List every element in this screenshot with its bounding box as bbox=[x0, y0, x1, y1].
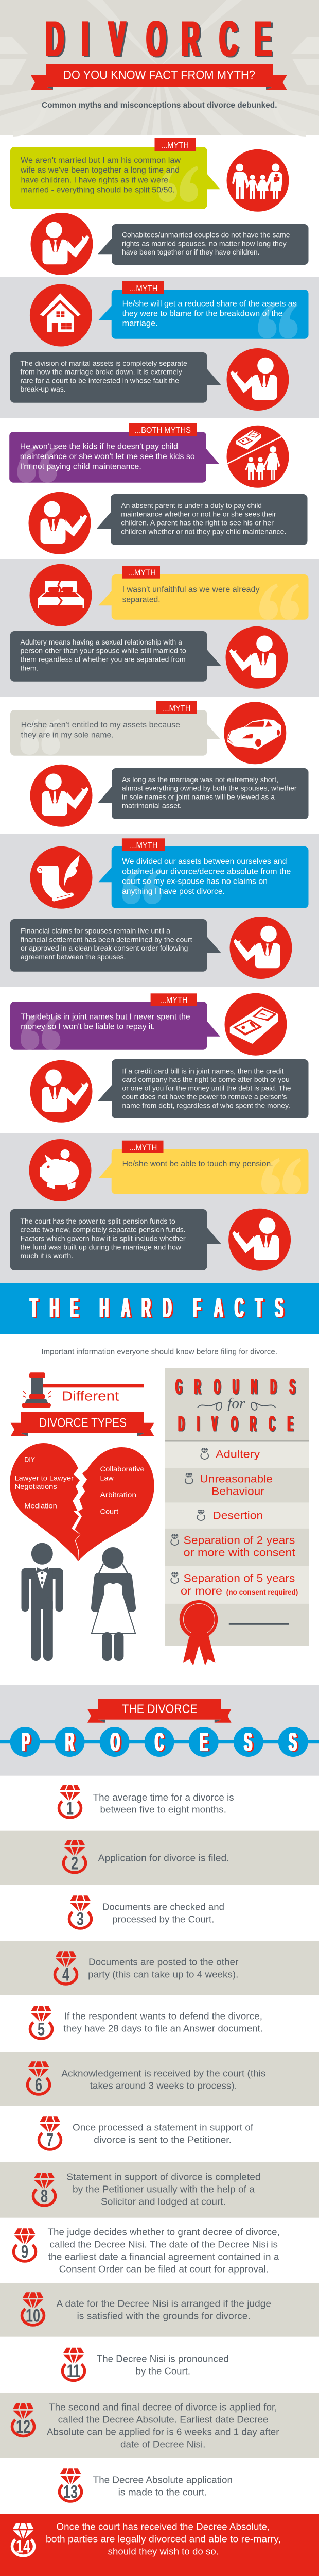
myth text bbox=[122, 857, 291, 896]
chart: broken heart with divorce types: Negotiations bbox=[14, 1482, 57, 1490]
step 9: Consent Order can be filed at court for approval. bbox=[59, 2264, 269, 2275]
ground: separation of 2 years: Separation of 2 years bbox=[184, 1535, 295, 1547]
myth tag bbox=[154, 138, 196, 151]
step 12: 12 bbox=[16, 2417, 30, 2437]
step 4: Documents are posted to the other bbox=[88, 1957, 238, 1968]
myth tag bbox=[122, 1141, 164, 1153]
subtitle: Common myths and misconceptions about divorce debunked. bbox=[42, 101, 277, 110]
answer text bbox=[21, 638, 186, 672]
answer text bbox=[21, 927, 192, 961]
myth text: obtained our divorce/decree absolute from the bbox=[122, 867, 291, 876]
answer text: person other than your spouse while still married to bbox=[21, 647, 186, 655]
step 1: The average time for a divorce is bbox=[93, 1792, 234, 1803]
answer text: The court has the power to split pension funds to bbox=[21, 1217, 175, 1225]
answer text: matrimonial asset. bbox=[122, 802, 182, 809]
step 10: A date for the Decree Nisi is arranged if the judge bbox=[57, 2298, 271, 2309]
banner: the hard facts bbox=[0, 1283, 319, 1334]
icon: lawyer bbox=[229, 917, 292, 979]
ground: unreasonable behaviour: Behaviour bbox=[211, 1486, 264, 1498]
step 14 panel bbox=[0, 2514, 319, 2576]
step 6 bbox=[0, 2052, 319, 2106]
myth text bbox=[21, 721, 180, 739]
step 5: If the respondent wants to defend the divorce, bbox=[64, 2010, 262, 2021]
myth text: have children. I have rights as if we were bbox=[21, 176, 168, 184]
icon: money and children bbox=[226, 426, 289, 488]
answer text: Financial claims for spouses remain live until a bbox=[21, 927, 171, 935]
step 11: 11 bbox=[67, 2361, 80, 2381]
step 1 bbox=[59, 1785, 234, 1819]
panel: answer 8 bbox=[10, 1209, 291, 1271]
myth tag: ...MYTH bbox=[163, 704, 190, 713]
ribbon: the divorce bbox=[87, 1699, 232, 1723]
ground: adultery: Adultery bbox=[216, 1448, 260, 1460]
heading: different: Different bbox=[62, 1389, 119, 1403]
step 14 panel: should they wish to do so. bbox=[108, 2546, 219, 2557]
step 12: date of Decree Nisi. bbox=[120, 2439, 205, 2450]
step 2: 2 bbox=[71, 1853, 78, 1873]
myth text bbox=[21, 1012, 190, 1031]
band: section background bbox=[0, 277, 319, 418]
step 13: The Decree Absolute application bbox=[93, 2474, 233, 2485]
chart: broken heart with divorce types bbox=[10, 1443, 154, 1561]
myth tag: ...MYTH bbox=[130, 841, 157, 850]
ground: separation of 5 years: or more bbox=[181, 1585, 222, 1597]
panel: myth 2 reduced share bbox=[30, 281, 308, 346]
answer text: As long as the marriage was not extremely short, bbox=[122, 776, 278, 784]
chart: broken heart with divorce types: Lawyer to Lawyer bbox=[14, 1473, 74, 1482]
ground: separation of 5 years bbox=[165, 1566, 309, 1604]
myth text bbox=[20, 443, 195, 471]
band: section background bbox=[0, 834, 319, 987]
icon: lawyer bbox=[228, 1209, 291, 1271]
panel: answer 3 bbox=[29, 492, 308, 554]
step 6: Acknowledgement is received by the court (this bbox=[61, 2068, 265, 2079]
step 6: takes around 3 weeks to process). bbox=[90, 2080, 237, 2091]
step 7: Once processed a statement in support of bbox=[73, 2122, 254, 2133]
myth tag: ...MYTH bbox=[130, 284, 157, 293]
step 2: Application for divorce is filed. bbox=[98, 1852, 229, 1863]
answer text: The division of marital assets is completely separate bbox=[21, 360, 187, 367]
icon: lawyer bbox=[30, 765, 93, 827]
step 4 bbox=[0, 1941, 319, 1995]
panel: grounds for divorce bbox=[165, 1368, 309, 1666]
panel: answer 2 bbox=[10, 348, 289, 411]
answer text: almost everything owned by both the spouses, whether bbox=[122, 785, 297, 792]
step 14 panel: both parties are legally divorced and able to re-marry, bbox=[46, 2534, 281, 2545]
ribbon: do you know fact from myth: DO YOU KNOW FACT FROM MYTH? bbox=[63, 68, 255, 82]
step 5: 5 bbox=[38, 2020, 45, 2040]
answer text: or approved in a clean break consent order following bbox=[21, 944, 188, 952]
icon: gavel bbox=[22, 1372, 144, 1408]
ribbon: divorce types bbox=[11, 1412, 154, 1436]
chart: broken heart with divorce types: Law bbox=[100, 1473, 114, 1482]
step 7: divorce is sent to the Petitioner. bbox=[94, 2134, 232, 2145]
step 14 panel: Once the court has received the Decree Absolute, bbox=[57, 2521, 270, 2532]
icon: rosette seal and signature line bbox=[180, 1600, 289, 1666]
myth tag bbox=[129, 423, 197, 436]
ground: desertion bbox=[165, 1503, 309, 1529]
step 9: 9 bbox=[21, 2242, 28, 2262]
myth tag bbox=[122, 281, 164, 294]
answer text: rare for a court to be interested in whose fault the bbox=[21, 377, 179, 384]
answer text: them regardless of whether you are separated from bbox=[21, 655, 186, 663]
panel: myth 3 child maintenance bbox=[9, 423, 289, 488]
ground: adultery bbox=[165, 1442, 309, 1468]
step 10 bbox=[0, 2283, 319, 2337]
ground: unreasonable behaviour: Unreasonable bbox=[200, 1473, 273, 1485]
step 8: Statement in support of divorce is completed bbox=[66, 2172, 261, 2182]
answer text: Adultery means having a sexual relationship with a bbox=[21, 638, 182, 646]
answer text: much it is worth. bbox=[21, 1252, 73, 1260]
myth text: money so I won't be liable to repay it. bbox=[21, 1023, 155, 1031]
heading: for with flourishes: for bbox=[227, 1396, 245, 1412]
panel: answer 6 bbox=[10, 917, 292, 979]
step 10: 10 bbox=[26, 2306, 40, 2326]
answer text: the fund was built up during the marriage and how bbox=[21, 1243, 181, 1251]
icon: money bbox=[224, 993, 287, 1056]
panel: different divorce types bbox=[10, 1372, 154, 1661]
step 4: 4 bbox=[62, 1965, 69, 1985]
answer text: rights as married spouses, no matter how long they bbox=[122, 240, 287, 247]
icon: house bbox=[30, 284, 92, 346]
panel: myth 6 post divorce claims bbox=[30, 838, 309, 909]
answer text: in sole names or joint names will be viewed as a bbox=[122, 793, 275, 801]
panel: answer 5 bbox=[30, 765, 309, 827]
myth tag: ...MYTH bbox=[161, 141, 189, 150]
step 7 bbox=[39, 2116, 254, 2150]
panel: answer 7 bbox=[30, 1059, 309, 1123]
step 8: by the Petitioner usually with the help of a bbox=[73, 2184, 255, 2195]
icon: piggy bank bbox=[29, 1139, 92, 1201]
step 8 bbox=[0, 2162, 319, 2218]
step 3 bbox=[69, 1895, 224, 1929]
step 8: Solicitor and lodged at court. bbox=[101, 2196, 226, 2207]
step 12: Absolute can be applied for is 6 weeks and 1 day after bbox=[47, 2427, 279, 2437]
answer text: card company has the right to come after both of you bbox=[122, 1076, 290, 1083]
answer text: have been together or if they have children. bbox=[122, 248, 259, 256]
icon: family bbox=[226, 149, 289, 212]
step 10: is satisfied with the grounds for divorce. bbox=[77, 2311, 251, 2321]
myth tag bbox=[122, 566, 160, 579]
step 3: 3 bbox=[77, 1909, 84, 1929]
myth text: We divided our assets between ourselves and bbox=[122, 857, 287, 866]
step 12 bbox=[0, 2393, 319, 2458]
title: DIVORCE bbox=[46, 12, 271, 67]
answer text: break-up was. bbox=[21, 385, 66, 393]
myth tag: ...MYTH bbox=[160, 996, 188, 1005]
heading: grounds: GROUNDS bbox=[175, 1375, 295, 1398]
step 6: 6 bbox=[35, 2075, 42, 2095]
answer text: court does not have the power to remove a person's bbox=[122, 1093, 287, 1101]
myth tag: ...BOTH MYTHS bbox=[135, 426, 191, 435]
icon: lawyer bbox=[226, 348, 289, 411]
myth text: I wasn't unfaithful as we were already bbox=[122, 585, 260, 594]
ribbon: the divorce: THE DIVORCE bbox=[122, 1702, 198, 1716]
banner: the hard facts: THE HARD FACTS bbox=[30, 1292, 283, 1323]
answer text: or one of you for the money until the debt is paid. The bbox=[122, 1084, 291, 1092]
myth text: court so my ex-spouse has no claims on bbox=[122, 877, 268, 886]
step 13 bbox=[60, 2468, 233, 2502]
chart: broken heart with divorce types: Collaborative bbox=[100, 1465, 145, 1473]
step 11 bbox=[63, 2348, 229, 2381]
panel: myth 5 sole name bbox=[10, 701, 286, 764]
step 14 panel: 14 bbox=[16, 2537, 30, 2557]
ground: separation of 2 years bbox=[165, 1529, 309, 1566]
answer text: children. A parent has the right to see his or her bbox=[121, 519, 274, 527]
chart: broken heart with divorce types: Arbitration bbox=[100, 1490, 136, 1499]
answer text: Factors which govern how it is split include whether bbox=[21, 1234, 186, 1242]
answer text: If a credit card bill is in joint names, then the credit bbox=[122, 1067, 284, 1075]
step 12: The second and final decree of divorce is applied for, bbox=[49, 2402, 277, 2413]
chart: broken heart with divorce types: DIY bbox=[24, 1455, 36, 1463]
answer text: them. bbox=[21, 664, 38, 672]
icon: lawyer bbox=[29, 492, 91, 554]
icon: bride bbox=[91, 1547, 136, 1661]
myth tag: ...MYTH bbox=[128, 569, 156, 578]
myth text: separated. bbox=[122, 595, 161, 604]
ribbon: do you know fact from myth bbox=[31, 64, 287, 90]
panel: myth 1 common law wife bbox=[10, 138, 289, 212]
icon: scroll and feather bbox=[30, 846, 93, 909]
answer text bbox=[122, 776, 297, 809]
myth text bbox=[20, 156, 181, 195]
myth text: they were to blame for the breakdown of the bbox=[122, 309, 283, 318]
answer text: name from debt, regardless of who spent the money. bbox=[122, 1101, 290, 1109]
step 3: processed by the Court. bbox=[112, 1914, 214, 1925]
ground: separation of 2 years: or more with consent bbox=[184, 1547, 295, 1559]
band: section background bbox=[0, 559, 319, 697]
step 9: The judge decides whether to grant decree of divorce, bbox=[47, 2227, 280, 2238]
step 9: the earliest date a financial agreement contained in a bbox=[48, 2251, 279, 2262]
myth tag bbox=[122, 838, 165, 851]
step 7: 7 bbox=[46, 2130, 54, 2150]
band: section background bbox=[0, 1133, 319, 1283]
icon: car bbox=[224, 702, 286, 764]
myth text: married - everything should be split 50/50. bbox=[21, 186, 175, 195]
step 8: 8 bbox=[41, 2187, 48, 2207]
step 11: by the Court. bbox=[136, 2366, 190, 2377]
myth text: The debt is in joint names but I never spent the bbox=[21, 1012, 190, 1021]
myth text: He/she wont be able to touch my pension. bbox=[122, 1160, 273, 1168]
step 3: Documents are checked and bbox=[102, 1902, 224, 1912]
myth text: they are in my sole name. bbox=[21, 731, 114, 739]
heading: for with flourishes bbox=[198, 1396, 275, 1412]
step 11: The Decree Nisi is pronounced bbox=[97, 2353, 229, 2364]
icon: groom bbox=[22, 1543, 63, 1661]
myth tag: ...MYTH bbox=[129, 1144, 157, 1153]
myth tag bbox=[151, 993, 197, 1006]
panel: myth 8 pension bbox=[29, 1139, 309, 1201]
answer text: children whether or not they pay child maintenance. bbox=[121, 528, 286, 536]
step 9 bbox=[14, 2227, 280, 2275]
myth text bbox=[122, 299, 297, 328]
panel: the divorce process heading bbox=[0, 1685, 319, 1776]
answer text: create two new, completely separate pension funds. bbox=[21, 1226, 186, 1234]
myth text: He/she will get a reduced share of the assets as bbox=[122, 299, 297, 308]
step 12: called the Decree Absolute. Earliest date Decree bbox=[58, 2414, 268, 2425]
ground: desertion: Desertion bbox=[212, 1510, 263, 1521]
myth text bbox=[122, 585, 260, 604]
icon: lawyer bbox=[31, 213, 93, 275]
answer text: agreement between the spouses. bbox=[21, 953, 126, 961]
answer text: Cohabitees/unmarried couples do not have the same bbox=[122, 231, 290, 239]
step 5: they have 28 days to file an Answer document. bbox=[63, 2023, 263, 2033]
myth text: maintenance or she won't let me see the kids so bbox=[20, 452, 195, 461]
step 4: party (this can take up to 4 weeks). bbox=[88, 1969, 238, 1980]
myth text: marriage. bbox=[122, 319, 158, 328]
ground: separation of 5 years: Separation of 5 years bbox=[184, 1573, 295, 1585]
answer text bbox=[122, 1067, 291, 1109]
panel: myth 4 unfaithful bbox=[30, 564, 309, 626]
myth text: anything I have post divorce. bbox=[122, 887, 225, 896]
answer text: An absent parent is under a duty to pay child bbox=[121, 502, 262, 510]
step 2 bbox=[0, 1831, 319, 1885]
icon: lawyer bbox=[30, 1060, 93, 1123]
chart: broken heart with divorce types: Mediation bbox=[24, 1501, 57, 1510]
panel: answer 1 bbox=[31, 213, 309, 275]
answer text: from how the marriage broke down. It is extremely bbox=[21, 368, 182, 376]
step 13: is made to the court. bbox=[118, 2487, 207, 2498]
step 1: between five to eight months. bbox=[100, 1804, 226, 1815]
myth text: He/she aren't entitled to my assets because bbox=[21, 721, 180, 730]
myth text: wife as we've been together a long time and bbox=[20, 166, 180, 175]
myth text: I'm not paying child maintenance. bbox=[20, 462, 141, 471]
myth tag bbox=[156, 701, 197, 714]
icon: lawyer bbox=[225, 626, 288, 689]
myth text: He won't see the kids if he doesn't pay child bbox=[20, 443, 178, 451]
ground: unreasonable behaviour bbox=[165, 1468, 309, 1503]
process timeline: PROCESS bbox=[22, 1728, 297, 1757]
answer text bbox=[121, 502, 286, 536]
panel: myth 7 joint debt bbox=[10, 993, 287, 1056]
step 9: called the Decree Nisi. The date of the Decree Nisi is bbox=[49, 2239, 278, 2250]
myth text: We aren't married but I am his common law bbox=[21, 156, 181, 165]
ground: separation of 5 years: (no consent required) bbox=[226, 1588, 298, 1596]
chart: broken heart with divorce types: Court bbox=[100, 1507, 118, 1515]
answer text bbox=[21, 1217, 186, 1260]
answer text bbox=[122, 231, 290, 256]
step 5 bbox=[30, 2006, 263, 2040]
answer text bbox=[21, 360, 187, 393]
icon: broken bed bbox=[30, 564, 92, 626]
panel: answer 4 bbox=[10, 626, 288, 689]
step 13: 13 bbox=[63, 2482, 78, 2502]
ribbon: divorce types: DIVORCE TYPES bbox=[39, 1416, 127, 1430]
answer text: maintenance whether or not he or she sees their bbox=[121, 511, 276, 518]
heading: divorce: DIVORCE bbox=[178, 1412, 293, 1435]
step 1: 1 bbox=[66, 1799, 74, 1819]
answer text: financial settlement has been determined by the court bbox=[21, 936, 192, 943]
panel: header bbox=[0, 0, 319, 135]
intro text: important information: Important information everyone should know before filing for divorce. bbox=[41, 1347, 277, 1356]
